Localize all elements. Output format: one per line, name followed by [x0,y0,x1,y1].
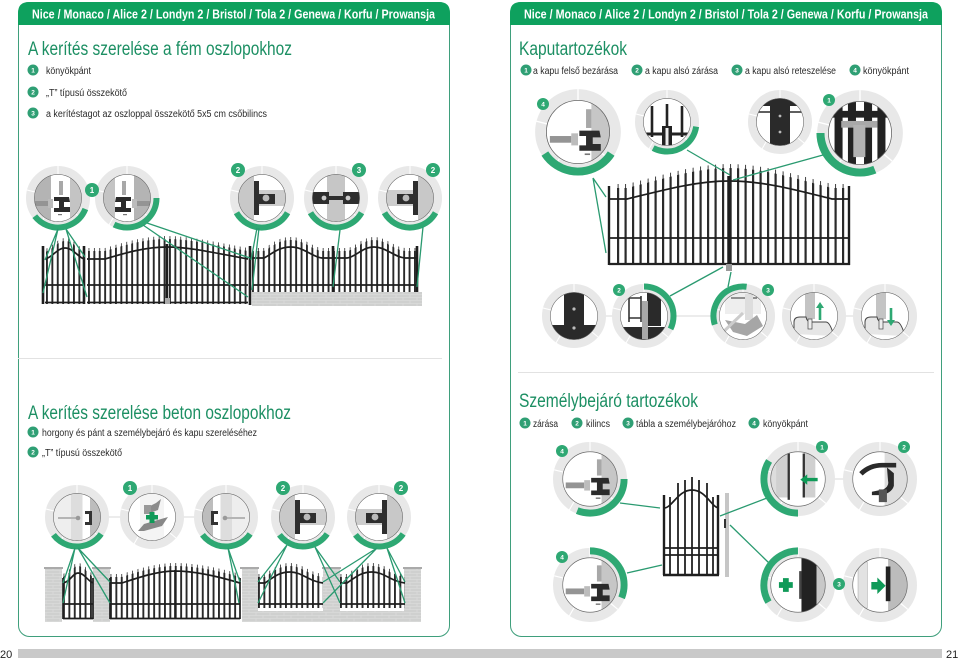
badge 3 [833,578,845,590]
detail circle: latch pin drop with arrow [854,284,913,344]
legend: gate accessories: 2 [635,68,639,74]
badge 4 upper: 4 [560,448,564,456]
badge 2 second [394,481,408,495]
legend: metal posts: 1 [31,68,35,74]
badge 1 [85,183,99,197]
legend: gate accessories: 4 [853,68,857,74]
badge 2: 2 [617,288,621,294]
legend: gate accessories: a kapu alsó zárása [645,66,718,77]
badge 2 [898,441,910,453]
legend: gate accessories: a kapu alsó reteszelése [745,66,836,77]
legend: metal posts: könyökpánt [46,66,91,77]
legend: wicket accessories: tábla a személybejáróhoz [636,419,736,430]
panel outline right [510,2,942,636]
detail circle: gate hinge [523,77,633,187]
double gate illustration [609,176,850,271]
badge 2 [231,163,245,177]
fence illustration on concrete posts [44,568,422,622]
detail circle: wicket upper hinge [554,442,624,513]
detail circle: gate top rail [749,90,808,150]
legend: wicket accessories: 2 [575,420,579,428]
legend: gate accessories [520,64,909,77]
header bar left [18,2,450,25]
detail circle: latch pin lift with arrow [783,284,842,344]
badge 2: 2 [902,444,906,452]
divider [518,372,934,374]
legend: metal posts: „T” típusú összekötő [46,88,127,99]
detail circle: anchor left [36,476,118,558]
detail circle: gate top spears [633,88,701,156]
legend: metal posts: 3 [31,110,35,118]
badge 1: 1 [820,444,824,452]
divider [18,358,442,360]
legend: wicket accessories: kilincs [586,419,610,430]
detail circle: T connector on concrete [262,476,344,558]
detail circle: lower gate lock [613,284,674,346]
legend: wicket accessories: 3 [626,420,630,428]
detail circle: handle [844,442,912,511]
detail circle: T connector on concrete mirrored [338,476,420,558]
badge 4: 4 [541,102,545,108]
panel outline left [18,2,450,636]
badge 1: 1 [128,484,133,493]
legend: wicket accessories: zárása [533,419,558,430]
badge 3 [762,284,774,296]
connectors lower gate circles [606,315,853,317]
heading: gate accessories: Kaputartozékok [519,39,627,60]
badge 2 [613,284,625,296]
footer strip [18,649,942,658]
legend: metal posts [28,64,267,120]
legend: concrete posts: 1 [31,430,35,436]
badge 1 [816,441,828,453]
legend: wicket accessories: 1 [523,420,527,428]
detail circle: top closing latch [809,82,911,184]
detail circle: T connector mirrored [370,158,450,238]
legend: wicket accessories: könyökpánt [763,419,808,430]
fence illustration on metal posts [43,244,422,306]
legend: gate accessories: a kapu felső bezárása [533,66,618,77]
badge 4 lower: 4 [560,554,564,562]
legend: wicket accessories: 4 [752,420,756,428]
badge 3: 3 [766,288,770,294]
badge 1: 1 [90,186,95,195]
wicket gate illustration [663,477,729,577]
legend: gate accessories: 3 [735,68,739,74]
badge 3 [352,163,366,177]
detail circle: hinge right [96,166,156,228]
legend: metal posts: 2 [31,90,35,96]
detail circle: pipe clamp [296,158,376,238]
badge 1 [823,94,835,106]
detail circle: lower latch [706,279,780,353]
detail circle: wicket lower hinge [554,548,624,619]
detail circle: T connector [222,158,302,238]
legend: concrete posts [28,426,257,459]
legend: gate accessories: könyökpánt [863,66,909,77]
legend: wicket accessories [520,418,808,430]
badge 4 [537,98,549,110]
badge 3: 3 [837,582,841,588]
badge 2 second [426,163,440,177]
badge 2 second: 2 [431,166,436,175]
leader lines concrete posts [63,545,405,603]
detail circle: anchor plus hinge [121,485,180,545]
badge 2: 2 [236,166,241,175]
detail circle: hinge left [20,160,96,236]
detail circle: plate on post [751,538,845,632]
leader lines wicket [620,498,769,573]
connectors between circles [108,516,195,518]
leader lines metal posts [43,223,423,297]
legend: concrete posts: horgony és pánt a személybejáró és kapu szereléséhez [42,428,257,439]
badge 4 upper [556,445,568,457]
detail circle: wicket lock [762,442,832,513]
badge 2 second: 2 [399,484,404,493]
detail circle: plate fitting [844,548,912,617]
legend: concrete posts: „T” típusú összekötő [42,448,122,459]
connectors wicket circles [834,479,845,585]
badge 2 [276,481,290,495]
panel: right page, gate and wicket accessories [510,2,942,636]
heading: concrete posts: A kerítés szerelése beton oszlopokhoz [28,403,291,424]
badge 1: 1 [827,98,831,104]
badge 1 [123,481,137,495]
badge 2: 2 [281,484,286,493]
panel: left page, metal posts and concrete posts [18,2,450,636]
badge 4 lower [556,551,568,563]
header text left: Nice / Monaco / Alice 2 / Londyn 2 / Bristol / Tola 2 / Genewa / Korfu / Prowansja [32,6,436,22]
heading: wicket accessories: Személybejáró tartozékok [519,391,698,412]
legend: metal posts: a kerítéstagot az oszloppal összekötő 5x5 cm csőbilincs [46,109,267,120]
detail circle: gate lower post [543,284,602,344]
header bar right [510,2,942,25]
leader lines gate [593,150,823,296]
legend: concrete posts: 2 [31,450,35,456]
badge 3: 3 [357,166,362,175]
detail circle: anchor right [185,476,267,558]
legend: gate accessories: 1 [524,68,528,74]
heading: metal posts: A kerítés szerelése a fém oszlopokhoz [28,39,292,60]
